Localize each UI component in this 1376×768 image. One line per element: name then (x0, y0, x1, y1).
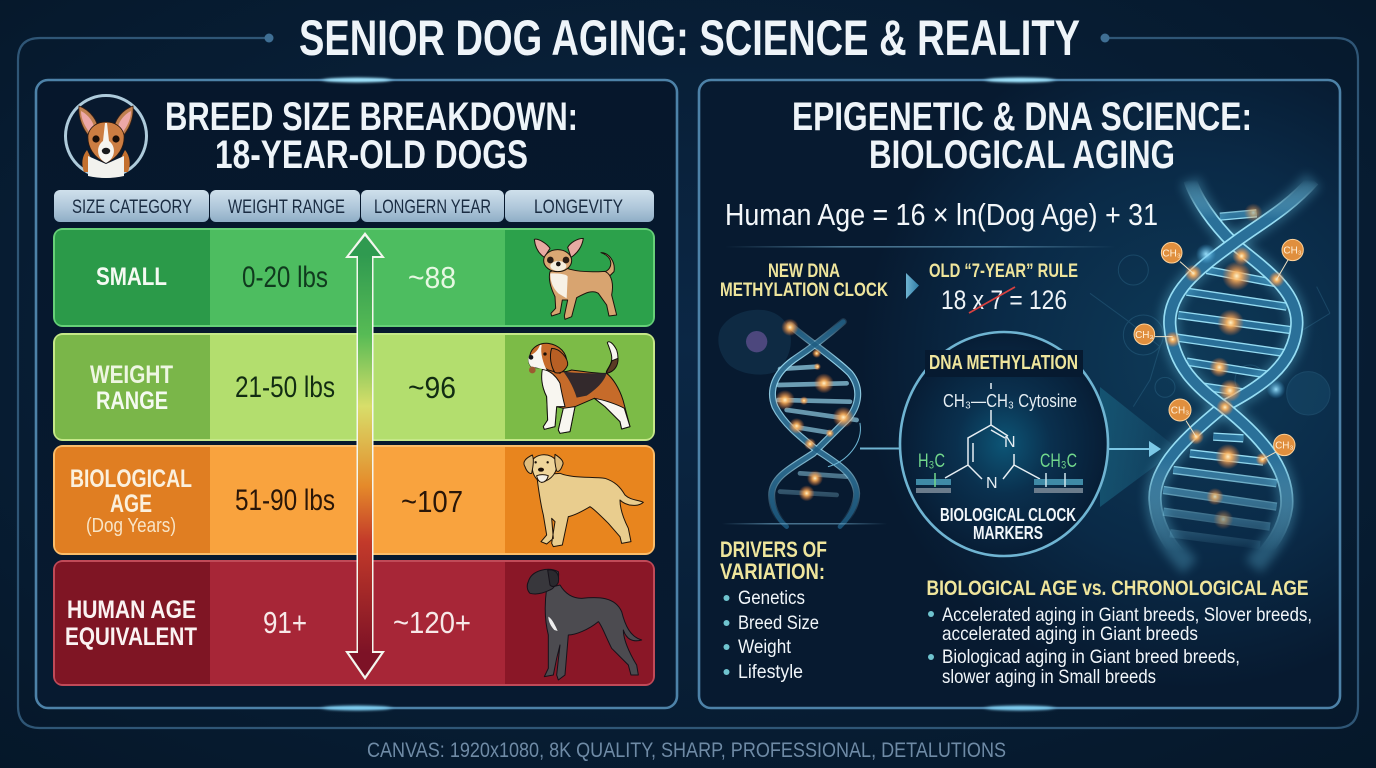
heading: breed size (165, 95, 578, 177)
circle: DNA methylation (900, 332, 1108, 556)
text: drivers of variation: Breed Size (738, 613, 819, 634)
row: small (54, 229, 654, 326)
title: SENIOR DOG AGING: SCIENCE & REALITY (299, 10, 1080, 66)
row: human age equivalent: 91+ (263, 605, 307, 640)
text: drivers of variation: Genetics (738, 588, 805, 609)
icon: cell (718, 310, 791, 375)
row: biological age: (Dog Years) (86, 515, 176, 537)
text: biological vs chronological age: Accelerated aging in Giant breeds, Slover breeds, (942, 604, 1312, 626)
text: drivers of variation: DRIVERS OF (720, 537, 827, 562)
panel: breed size breakdown (36, 78, 677, 710)
text: new DNA methylation clock (720, 261, 888, 301)
methyl markers: CH₃ (1135, 330, 1154, 341)
formula: Human Age = 16 × ln(Dog Age) + 31 (725, 197, 1158, 232)
text: drivers of variation: Weight (738, 637, 792, 658)
row: biological age: AGE (110, 490, 152, 518)
text: drivers of variation (720, 537, 827, 683)
arrow: new to old (906, 273, 919, 299)
text: new DNA methylation clock: NEW DNA (768, 261, 840, 282)
molecule diagram: N (986, 475, 998, 492)
row: weight range: RANGE (96, 387, 168, 415)
illustration: small DNA helix (718, 310, 860, 527)
row: human age equivalent: ~120+ (393, 605, 471, 640)
table header: LONGERN YEAR (374, 197, 491, 218)
table header: SIZE CATEGORY (72, 197, 192, 218)
cone and arrow: circle to large helix (1100, 387, 1178, 507)
molecule diagram: CH₃—CH₃ Cytosine (943, 391, 1077, 411)
text: biological vs chronological age: accelerated aging in Giant breeds (942, 623, 1198, 645)
row: biological age: ~107 (401, 484, 463, 519)
text: old 7-year rule (929, 261, 1078, 315)
row: human age equivalent (54, 561, 654, 685)
molecule diagram: N (1004, 434, 1016, 451)
text: drivers of variation: Lifestyle (738, 662, 803, 683)
icon: beagle (528, 342, 630, 433)
table header: LONGEVITY (534, 197, 623, 218)
icon: chihuahua (534, 238, 617, 319)
text: biological vs chronological age: Biologicad aging in Giant breed breeds, (942, 646, 1240, 668)
methyl markers: CH₃ (1171, 406, 1189, 417)
table header (54, 190, 654, 222)
molecule diagram: H₃C (918, 451, 945, 472)
row: biological age: BIOLOGICAL (70, 465, 192, 493)
icon: dog portrait (66, 96, 146, 178)
molecule diagram: CH₃C (1040, 451, 1077, 472)
methyl markers (1134, 239, 1303, 459)
background molecules (1090, 255, 1330, 415)
text: new DNA methylation clock: METHYLATION CLOCK (720, 280, 888, 301)
heading: epigenetic: BIOLOGICAL AGING (869, 133, 1175, 177)
label: biological clock markers: BIOLOGICAL CLOCK (940, 505, 1076, 525)
row: biological age: 51-90 lbs (235, 484, 335, 517)
table header: WEIGHT RANGE (228, 197, 345, 218)
row: human age equivalent: HUMAN AGE (67, 596, 196, 624)
heading: epigenetic: EPIGENETIC & DNA SCIENCE: (792, 95, 1252, 139)
label: biological clock markers: MARKERS (973, 523, 1043, 543)
heading: breed size: 18-YEAR-OLD DOGS (215, 133, 528, 177)
methyl markers: CH₃ (1275, 441, 1294, 452)
text: biological vs chronological age (926, 577, 1312, 688)
arrow: size to longevity gradient (345, 232, 385, 680)
methyl markers: CH₃ (1162, 248, 1181, 259)
row: weight range: WEIGHT (90, 361, 173, 389)
row: biological age (54, 446, 654, 554)
row: weight range: 21-50 lbs (235, 371, 335, 404)
row: small: 0-20 lbs (242, 261, 328, 294)
heading: breed size: BREED SIZE BREAKDOWN: (165, 95, 578, 139)
footer caption: CANVAS: 1920x1080, 8K QUALITY, SHARP, PROFESSIONAL, DETALUTIONS (367, 739, 1006, 762)
icon: great dane (527, 569, 642, 680)
text: drivers of variation: VARIATION: (720, 559, 825, 584)
label: biological clock markers (940, 505, 1076, 543)
text: old 7-year rule: OLD “7-YEAR” RULE (929, 261, 1078, 282)
row: small: ~88 (408, 260, 456, 295)
label: DNA methylation: DNA METHYLATION (929, 352, 1078, 374)
row: weight range: ~96 (408, 370, 456, 405)
text: biological vs chronological age: BIOLOGICAL AGE vs. CHRONOLOGICAL AGE (926, 577, 1308, 600)
text: biological vs chronological age: slower aging in Small breeds (942, 666, 1156, 688)
heading: epigenetic (792, 95, 1252, 177)
text: old 7-year rule: 18 x 7 = 126 (941, 285, 1067, 315)
panel: epigenetic and DNA science (699, 78, 1340, 710)
row: small: SMALL (96, 263, 167, 291)
row: weight range (54, 334, 654, 440)
icon: labrador (524, 454, 643, 547)
molecule diagram (916, 383, 1083, 493)
illustration: large DNA helix (1090, 180, 1330, 567)
row: human age equivalent: EQUIVALENT (65, 623, 197, 651)
methyl markers: CH₃ (1283, 246, 1302, 257)
connector: helix to circle (860, 448, 901, 450)
